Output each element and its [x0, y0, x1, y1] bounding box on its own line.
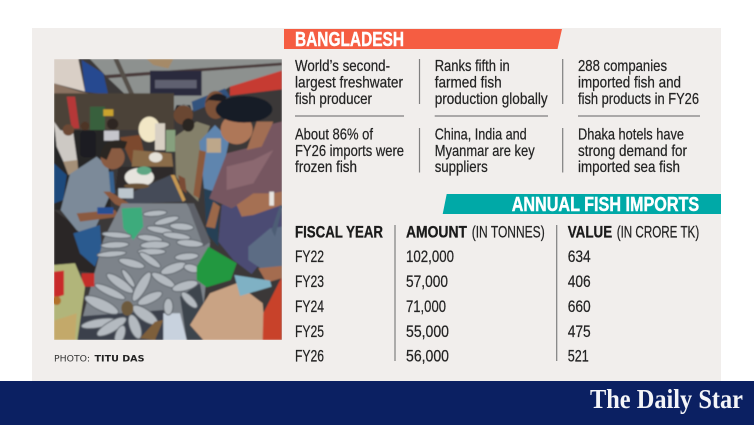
fact: importing companies: imported fish and [578, 74, 681, 92]
table column: fiscal year: FY22 [295, 248, 324, 266]
fact: hotel demand [578, 126, 688, 176]
fact: importing companies [578, 58, 699, 108]
table column: value: 660 [568, 298, 591, 316]
fact: hotel demand: imported sea fish [578, 159, 680, 176]
fact: key suppliers [435, 126, 535, 176]
photo credit: PHOTO: [54, 354, 90, 364]
fact: importing companies: 288 companies [578, 58, 667, 75]
fact: frozen share: FY26 imports were [295, 143, 404, 160]
table column: fiscal year: FY25 [295, 323, 324, 341]
fact: frozen share: About 86% of [295, 126, 373, 144]
table column: amount [406, 224, 545, 366]
fact: farmed fish rank: farmed fish [435, 74, 502, 92]
fact: farmed fish rank: production globally [435, 91, 548, 108]
table column: amount: 102,000 [406, 248, 454, 266]
table column: amount: 57,000 [406, 273, 448, 291]
fact: frozen share [295, 126, 404, 176]
fact: freshwater producer [295, 58, 404, 108]
fact: key suppliers: China, India and [435, 126, 527, 144]
fact: farmed fish rank: Ranks fifth in [435, 58, 510, 75]
table column: value: 634 [568, 248, 591, 266]
photo credit [54, 354, 144, 364]
photo: fish market stall [52, 59, 283, 346]
table column: fiscal year: FISCAL YEAR [295, 224, 383, 242]
table column: value: (IN CRORE TK) [617, 224, 699, 242]
table column: amount: AMOUNT [406, 224, 467, 242]
background panel [32, 28, 721, 381]
table column: fiscal year: FY26 [295, 348, 324, 366]
table column: amount: 71,000 [406, 298, 446, 316]
fact: freshwater producer: fish producer [295, 91, 373, 108]
heading banner: annual fish imports: ANNUAL FISH IMPORTS [512, 193, 699, 216]
table column: value: 406 [568, 273, 591, 291]
fact: hotel demand: strong demand for [578, 143, 688, 160]
photo credit: TITU DAS [94, 354, 144, 364]
table column: fiscal year [295, 224, 383, 366]
table column: fiscal year: FY23 [295, 273, 324, 291]
fact: hotel demand: Dhaka hotels have [578, 126, 684, 144]
table column: value [568, 224, 699, 366]
table column: amount: (IN TONNES) [472, 224, 545, 242]
table column: value: 521 [568, 348, 589, 366]
heading banner: Bangladesh [284, 28, 562, 51]
fact: freshwater producer: largest freshwater [295, 74, 404, 92]
heading banner: annual fish imports [443, 193, 721, 216]
table column: amount: 56,000 [406, 348, 449, 366]
fact: key suppliers: Myanmar are key [435, 143, 535, 160]
fact: frozen share: frozen fish [295, 159, 357, 176]
table column: amount: 55,000 [406, 323, 449, 341]
table column: value: VALUE [568, 224, 612, 242]
fact: importing companies: fish products in FY26 [578, 91, 699, 108]
table column: fiscal year: FY24 [295, 298, 324, 316]
fact: key suppliers: suppliers [435, 159, 488, 176]
footer band [0, 381, 754, 425]
heading banner: Bangladesh: BANGLADESH [295, 28, 404, 51]
fact: freshwater producer: World’s second- [295, 58, 390, 75]
table column: value: 475 [568, 323, 591, 341]
fact: farmed fish rank [435, 58, 548, 108]
